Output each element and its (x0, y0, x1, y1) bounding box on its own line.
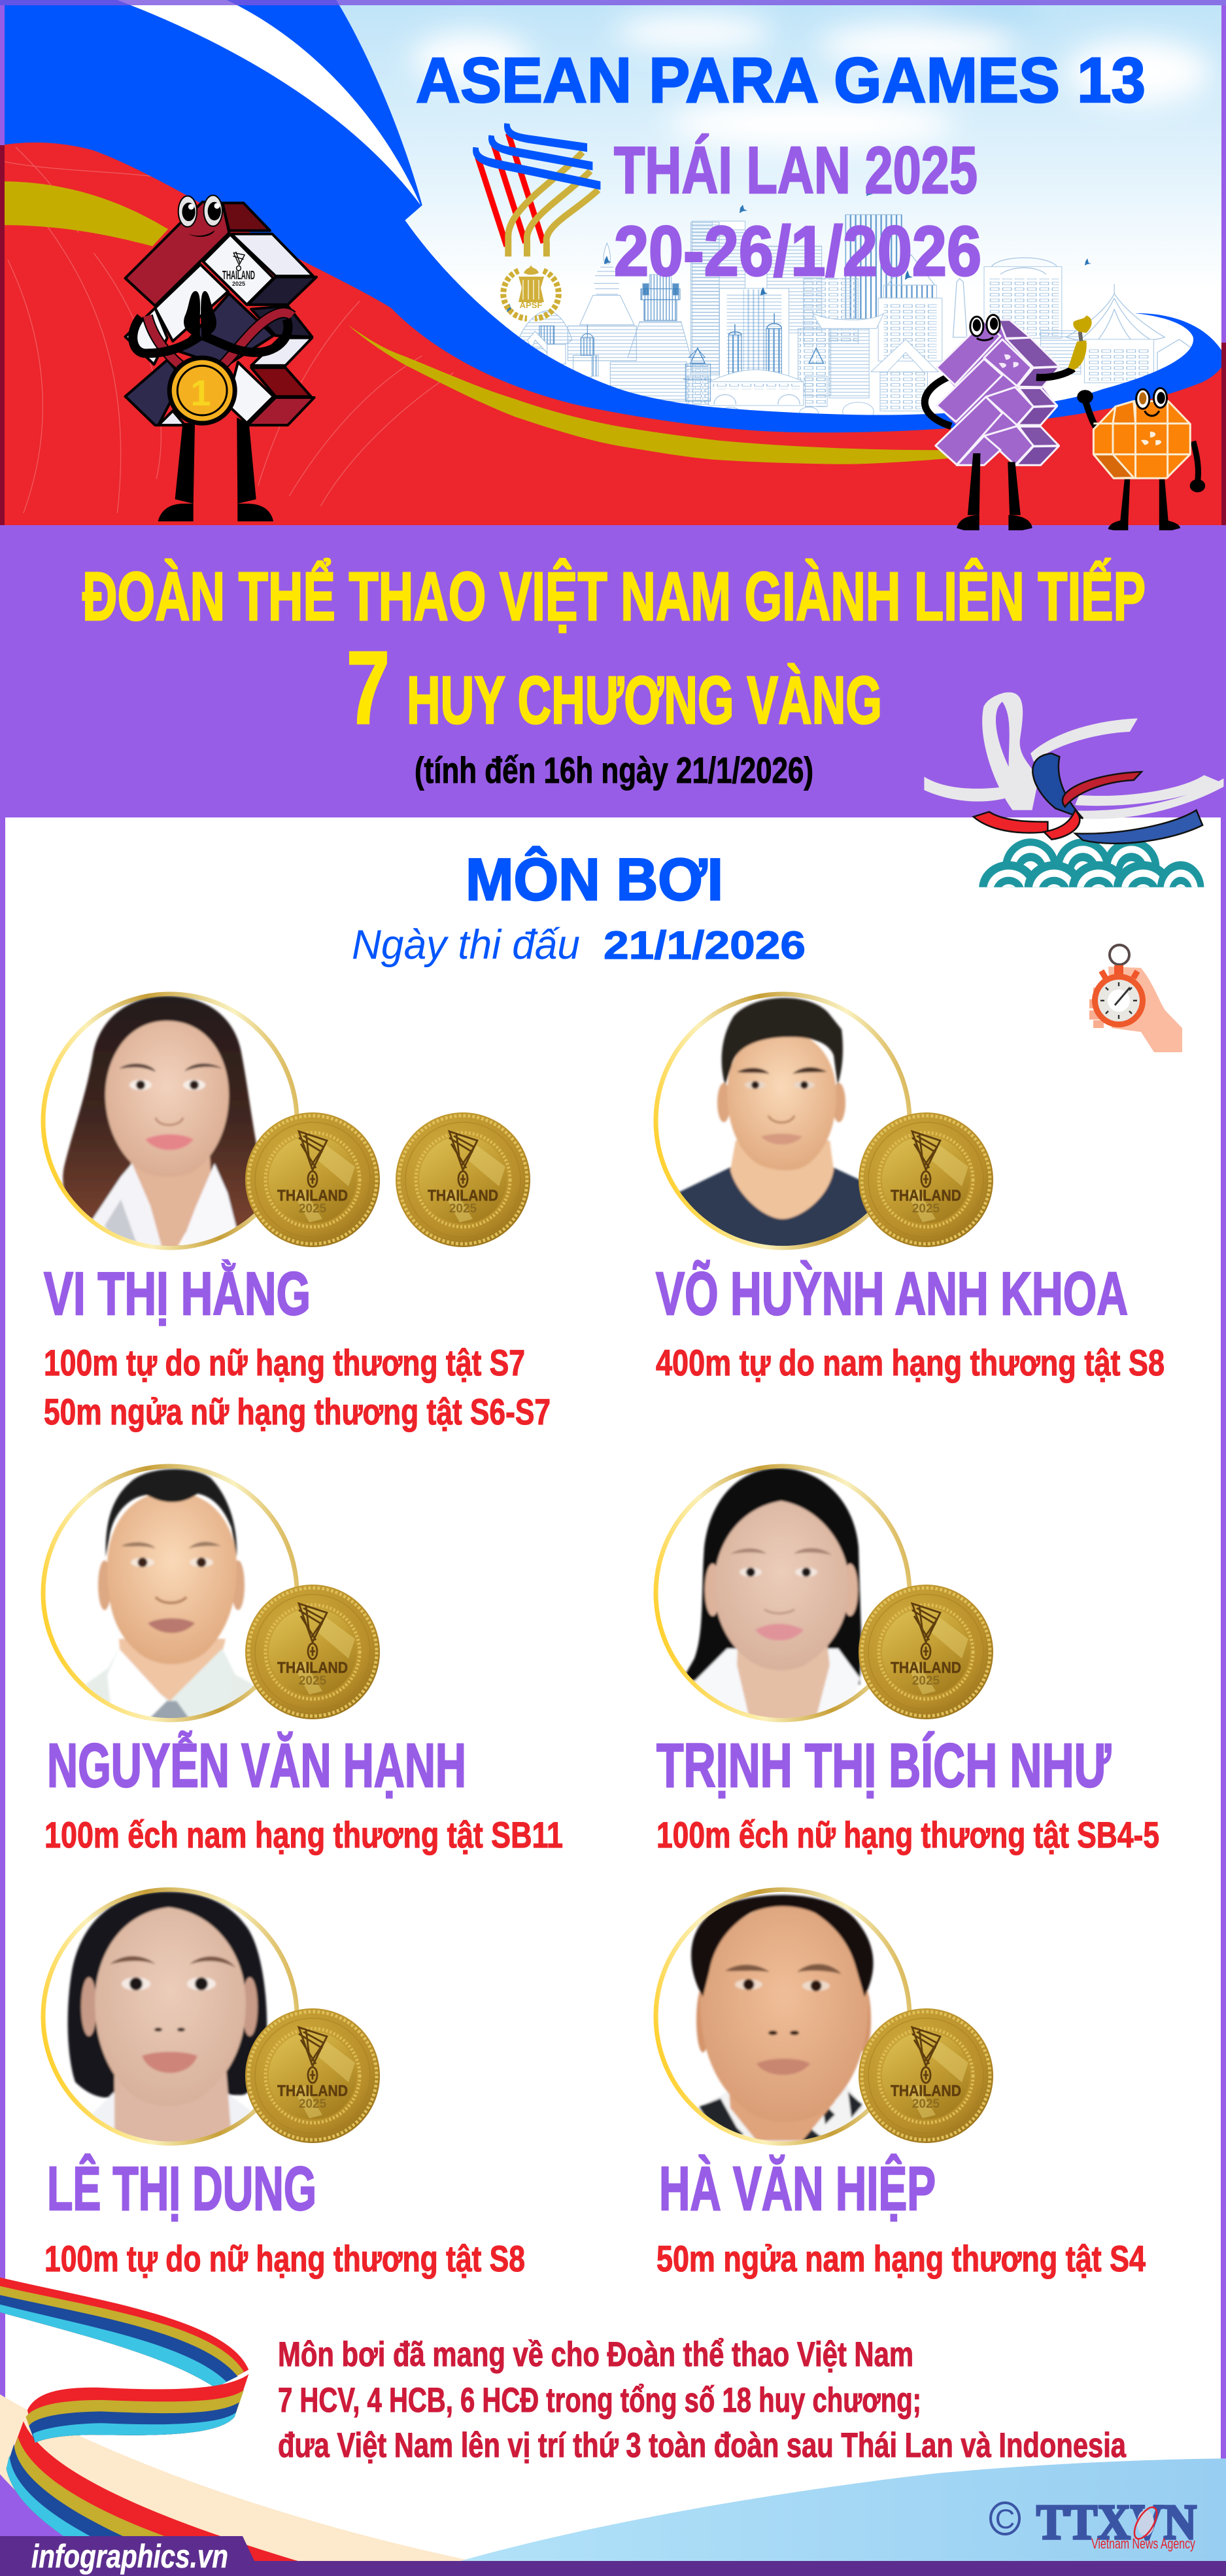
header banner artwork (0, 0, 1226, 536)
portrait frame (656, 1466, 910, 1720)
headline line 2: HUY CHƯƠNG VÀNG (407, 662, 882, 738)
section heading: MÔN BƠI (466, 846, 723, 913)
portrait frame (43, 994, 297, 1248)
gold medal: THAILAND (277, 1659, 348, 1677)
city skyline (687, 215, 1197, 415)
title: ASEAN PARA GAMES 13: ASEAN PARA GAMES 13 (416, 44, 1146, 116)
name: NGUYỄN VĂN HẠNH (47, 1731, 466, 1800)
cream curve (0, 2394, 477, 2562)
competition date label: Ngày thi đấu (352, 922, 580, 968)
title: host country: THÁI LAN 2025 (614, 134, 978, 207)
emblem: APSF wreath: APSF (520, 300, 542, 310)
footer artwork: shapes and ribbon (0, 2278, 1226, 2562)
gold medal: THAILAND (891, 1659, 961, 1677)
athlete: Vi Thị Hằng (43, 994, 551, 1432)
headline note: (tính đến 16h ngày 21/1/2026) (415, 749, 813, 791)
red field and wave shapes (0, 0, 1226, 536)
blue swoosh (0, 0, 1224, 432)
athlete: Nguyễn Văn Hạnh (43, 1466, 563, 1855)
mascot: red cube with gold medal: THAILAND (222, 269, 255, 282)
portrait frame (43, 1466, 297, 1720)
gold medal: 2025 (299, 2097, 327, 2111)
portrait frame (656, 1890, 910, 2144)
portrait (679, 996, 867, 1246)
ribbon middle section (26, 2374, 248, 2443)
track lines on red (0, 147, 454, 513)
gold medal (245, 1585, 380, 1719)
agency wordmark: TTXVN (1036, 2495, 1197, 2550)
gold medal: THAILAND (891, 1187, 961, 1205)
mascot: orange character (1077, 388, 1205, 530)
gold medal 1: THAILAND (277, 1187, 348, 1205)
source label: infographics.vn (31, 2538, 228, 2575)
purple headline band (0, 525, 1226, 817)
name: VI THỊ HẰNG (44, 1260, 311, 1328)
logo: ASEAN Para Games mark (473, 123, 600, 256)
gold medal 1: 2025 (299, 1202, 327, 1216)
headline number 7: 7 (347, 630, 390, 746)
mascot: red cube with gold medal: 1 (190, 372, 211, 413)
athlete: Võ Huỳnh Anh Khoa (656, 994, 1165, 1383)
gold medal (245, 2008, 380, 2143)
portrait (68, 1891, 267, 2144)
portrait frame (43, 1890, 297, 2144)
event: 100m tự do nữ hạng thương tật S8 (44, 2238, 525, 2279)
page frame: purple background (0, 525, 1226, 2576)
purple corner (0, 2474, 67, 2562)
gold medal: 2025 (912, 2097, 940, 2111)
footer purple bar (0, 2561, 1226, 2576)
light blue curve (458, 2458, 1226, 2562)
event 2: 50m ngửa nữ hạng thương tật S6-S7 (44, 1391, 551, 1432)
white stripe (117, 0, 420, 205)
event: 100m ếch nam hạng thương tật SB11 (44, 1814, 563, 1855)
copyright mark: C (995, 2503, 1015, 2534)
portrait (691, 1895, 874, 2148)
title: dates: 20-26/1/2026 (614, 211, 981, 290)
gold medal: 2025 (912, 1674, 940, 1688)
clouds (412, 1, 1210, 150)
gold medal 2: THAILAND (428, 1187, 498, 1205)
gold medal 2 (396, 1112, 530, 1247)
portrait (683, 1468, 861, 1721)
city skyline: left temples (517, 222, 719, 401)
athlete: Hà Văn Hiệp (656, 1890, 1146, 2279)
sky background (336, 0, 1226, 256)
mascot: red cube with gold medal: 2025 (232, 281, 245, 287)
portrait (85, 1469, 254, 1724)
gold medal: 2025 (299, 1674, 327, 1688)
gold medal (859, 1112, 993, 1247)
gold medal (859, 2008, 993, 2143)
gold medal: THAILAND (891, 2082, 961, 2100)
birds (507, 189, 1091, 312)
gold stripes (0, 181, 168, 247)
logo: TTXVN copyright (991, 2495, 1197, 2552)
copyright mark (991, 2503, 1019, 2534)
emblem: APSF wreath (503, 265, 558, 318)
left and right border over banner (0, 5, 1226, 343)
ribbon lower section (7, 2422, 301, 2562)
ribbon upper section (0, 2278, 248, 2388)
white content panel (5, 817, 1221, 2564)
top strip (0, 0, 1226, 5)
decoration: ribbons over waves (924, 692, 1224, 887)
name: HÀ VĂN HIỆP (659, 2154, 936, 2224)
icon: stopwatch in hand (1089, 945, 1182, 1052)
event 1: 100m tự do nữ hạng thương tật S7 (44, 1342, 525, 1383)
summary text line 1: Môn bơi đã mang về cho Đoàn thể thao Việt Nam (278, 2335, 913, 2374)
gold medal: 2025 (912, 1202, 940, 1216)
gold medal 2: 2025 (449, 1202, 477, 1216)
athlete: Trịnh Thị Bích Như (656, 1466, 1159, 1855)
mascot: purple character holding torch (925, 315, 1092, 530)
portrait frame (656, 994, 910, 1248)
name: LÊ THỊ DUNG (47, 2154, 316, 2224)
portrait (63, 996, 262, 1248)
gold medal (859, 1585, 993, 1719)
gold medal 1 (245, 1112, 380, 1247)
athlete: Lê Thị Dung (43, 1890, 525, 2279)
footer source tab (0, 2536, 262, 2576)
competition date value: 21/1/2026 (604, 923, 806, 967)
agency globe (1130, 2504, 1161, 2542)
mascot: red cube with gold medal (126, 196, 316, 521)
summary text line 2: 7 HCV, 4 HCB, 6 HCĐ trong tổng số 18 huy chương; (278, 2381, 921, 2420)
gold medal: THAILAND (277, 2082, 348, 2100)
